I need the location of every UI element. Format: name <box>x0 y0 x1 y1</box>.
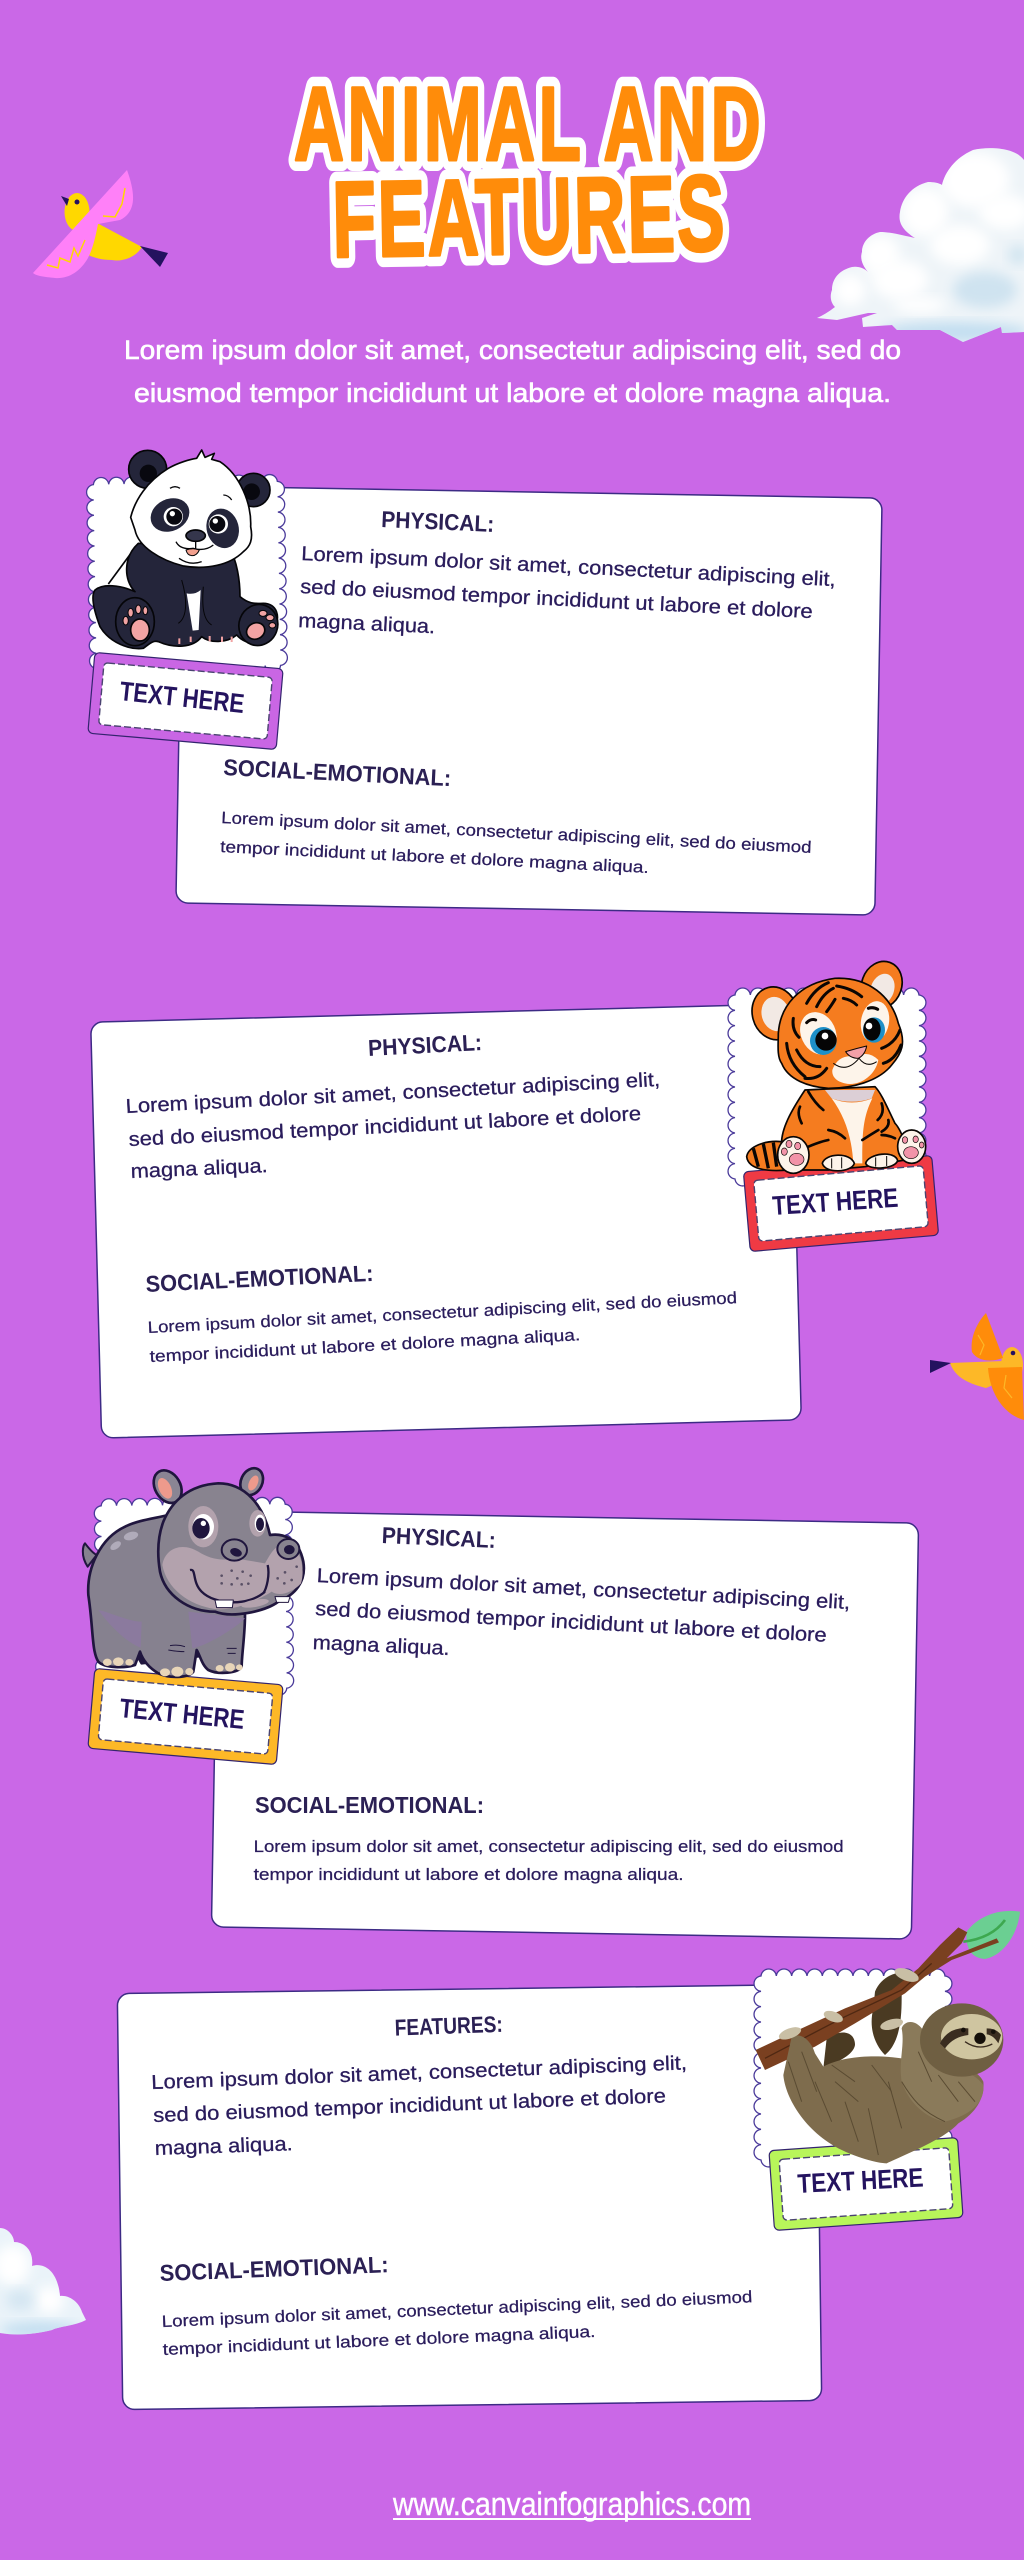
heading: physical: PHYSICAL: <box>367 1029 483 1061</box>
title: FEATURES <box>331 153 725 281</box>
text block: features body: Lorem ipsum dolor sit amet, consectetur adipiscing elit, <box>151 2052 687 2094</box>
title: FEATURES <box>331 153 725 281</box>
stamp: hippo backing <box>94 1497 294 1697</box>
text block: physical body: Lorem ipsum dolor sit amet, consectetur adipiscing elit, <box>125 1069 661 1118</box>
text block: features body <box>151 2052 687 2160</box>
text block: social-emotional body: tempor incididunt ut labore et dolore magna aliqua. <box>149 1326 581 1366</box>
label text: hippo: TEXT HERE <box>118 1693 246 1735</box>
icon: panda <box>93 450 284 651</box>
label text: panda: TEXT HERE <box>118 676 246 719</box>
label: panda <box>88 652 283 750</box>
text block: social-emotional body <box>161 2288 753 2359</box>
icon: pink and yellow bird <box>33 170 168 278</box>
heading: social-emotional: SOCIAL-EMOTIONAL: <box>159 2251 389 2286</box>
text block: physical body <box>125 1069 661 1183</box>
text block: features body: magna aliqua. <box>154 2133 293 2160</box>
label: tiger <box>743 1155 939 1252</box>
text block: social-emotional body <box>254 1838 844 1884</box>
text block: social-emotional body: Lorem ipsum dolor sit amet, consectetur adipiscing elit, sed do eiusmod <box>147 1289 737 1337</box>
subtitle: Lorem ipsum dolor sit amet, consectetur adipiscing elit, sed do <box>124 335 901 365</box>
text block: physical body: magna aliqua. <box>312 1632 450 1660</box>
text block: social-emotional body: Lorem ipsum dolor sit amet, consectetur adipiscing elit, sed do eiusmod <box>254 1838 844 1856</box>
text block: social-emotional body: Lorem ipsum dolor sit amet, consectetur adipiscing elit, sed do eiusmod <box>161 2288 753 2331</box>
heading: social-emotional: SOCIAL-EMOTIONAL: <box>255 1792 484 1818</box>
panel: tiger card <box>91 1004 801 1438</box>
text block: physical body: sed do eiusmod tempor incididunt ut labore et dolore <box>128 1103 642 1151</box>
text block: social-emotional body: tempor incididunt ut labore et dolore magna aliqua. <box>220 838 649 877</box>
text block: physical body: Lorem ipsum dolor sit amet, consectetur adipiscing elit, <box>316 1565 851 1614</box>
icon: orange bird <box>930 1313 1024 1420</box>
label text: sloth: TEXT HERE <box>797 2162 924 2199</box>
icon: cloud top right <box>810 145 1024 345</box>
text block: social-emotional body: Lorem ipsum dolor sit amet, consectetur adipiscing elit, sed do eiusmod <box>221 809 812 857</box>
text block: physical body: magna aliqua. <box>130 1155 268 1183</box>
text block: physical body <box>298 543 836 638</box>
heading: physical: PHYSICAL: <box>381 1522 496 1553</box>
heading: features: FEATURES: <box>394 2011 503 2041</box>
text block: social-emotional body: tempor incididunt ut labore et dolore magna aliqua. <box>254 1866 684 1884</box>
icon: sloth on a branch <box>756 1911 1020 2163</box>
heading: social-emotional: SOCIAL-EMOTIONAL: <box>145 1260 374 1297</box>
subtitle <box>124 335 901 408</box>
text block: features body: sed do eiusmod tempor incididunt ut labore et dolore <box>153 2085 666 2127</box>
text block: physical body: magna aliqua. <box>298 610 436 638</box>
heading: social-emotional: SOCIAL-EMOTIONAL: <box>223 754 452 791</box>
panel: sloth card <box>117 1984 822 2410</box>
title <box>294 64 761 281</box>
icon: cloud bottom left <box>0 2225 90 2338</box>
panel: panda card <box>176 486 882 915</box>
icon: hippo <box>83 1464 304 1677</box>
label: sloth <box>769 2138 963 2230</box>
subtitle: eiusmod tempor incididunt ut labore et dolore magna aliqua. <box>134 378 891 408</box>
text block: social-emotional body: tempor incididunt ut labore et dolore magna aliqua. <box>162 2323 596 2359</box>
panel: hippo card <box>211 1511 919 1939</box>
stamp: sloth backing <box>754 1969 952 2167</box>
text block: physical body <box>312 1565 851 1660</box>
label text: tiger: TEXT HERE <box>771 1183 899 1221</box>
stamp: panda backing <box>86 474 288 676</box>
heading: physical: PHYSICAL: <box>381 506 495 537</box>
icon: tiger <box>746 956 926 1173</box>
title: ANIMAL AND <box>294 64 761 182</box>
text block: physical body: Lorem ipsum dolor sit amet, consectetur adipiscing elit, <box>301 543 836 591</box>
text block: physical body: sed do eiusmod tempor incididunt ut labore et dolore <box>300 576 813 623</box>
text block: social-emotional body <box>147 1289 737 1366</box>
footer link: www.canvainfographics.com <box>392 2486 751 2522</box>
label: hippo <box>88 1668 283 1765</box>
stamp: tiger backing <box>728 988 926 1186</box>
title: ANIMAL AND <box>294 64 761 182</box>
text block: physical body: sed do eiusmod tempor incididunt ut labore et dolore <box>315 1598 827 1647</box>
text block: social-emotional body <box>220 809 812 877</box>
